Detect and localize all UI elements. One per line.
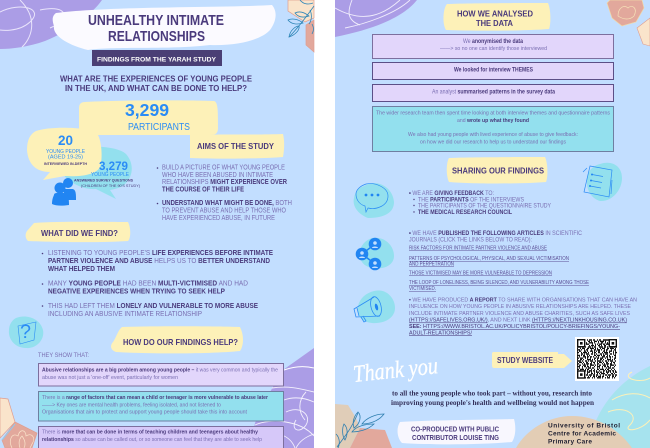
text block: findings bullets: WHAT HELPED THEM [48,266,115,273]
panel: finding box 3: relationships so abuse can be called out, or so someone can feel that they are able to seek help [42,437,262,443]
panel: method box research team: on how we did our research to help us to understand our findings [420,139,566,145]
text: they show that: THEY SHOW THAT: [38,353,89,359]
heading: main question: WHAT ARE THE EXPERIENCES OF YOUNG PEOPLE [60,74,252,84]
text block: aims bullets: WHO HAVE BEEN ABUSED IN INTIMATE [162,172,273,179]
stat: 3,279 young people text: (CHILDREN OF THE 90'S STUDY) [81,183,141,188]
panel: method box research team: We also had young people with lived experience of abuse to give feedback: [408,132,578,138]
text: thanks message: improving young people's health and wellbeing would not happen [391,400,594,407]
decoration: bottom left hexagons and leaves [335,404,392,448]
heading: how we analysed the data: THE DATA [476,18,513,28]
button: co-produced brush label [398,419,515,444]
text block: report: INCLUDE INTIMATE PARTNER VIOLENCE AND ABUSE CHARITIES, SUCH AS SAFE LIVES [409,311,630,317]
stat: 3,299 participants: 3,299 [125,100,169,120]
panel: method box anonymised [372,34,614,58]
panel: method box patterns [372,84,614,102]
text block: aims bullets: UNDERSTAND WHAT MIGHT BE DONE, BOTH [162,200,292,207]
panel: finding box 2: Organisations that aim to protect and support young people should take this into account [42,410,247,416]
text block: aims bullets [157,164,292,222]
text block: report: ADULT-RELATIONSHIPS/ [409,330,472,336]
decoration: title brush stroke [53,5,276,50]
stat: 3,299 participants [79,100,218,135]
heading: how do our findings help [111,326,243,353]
text block: findings bullets [42,250,273,318]
panel: method box anonymised: We anonymised the data [463,39,524,45]
title: RELATIONSHIPS [108,28,205,45]
title [88,12,224,45]
text block: published articles: JOURNALS (CLICK THE LINKS BELOW TO READ): [409,238,532,244]
decoration: bottom right purple blob [250,348,314,448]
panel: finding box 3 [38,426,284,448]
text block: giving feedback [409,191,551,216]
decoration: bottom right teal blob [588,366,650,448]
heading: how we analysed the data: HOW WE ANALYSED [457,8,533,18]
text block: published articles: PATTERNS OF PSYCHOLOGICAL, PHYSICAL, AND SEXUAL VICTIMISATION [409,256,569,262]
decoration: right page top right hexagons [607,0,650,46]
stat: 3,279 young people text [74,159,141,188]
stat bubble: 20 interviewed young people [27,128,102,180]
text block: findings bullets: PARTNER VIOLENCE AND ABUSE HELPS US TO BETTER UNDERSTAND [48,258,270,265]
text block: report [409,298,637,336]
text block: report: INFLUENCE ON HOW YOUNG PEOPLE IN ABUSIVE RELATIONSHIPS ARE HELPED. THESE [409,304,631,310]
panel: method box patterns: An analyst summarised patterns in the survey data [432,90,556,96]
callout: study website arrow: STUDY WEBSITE [497,355,553,365]
panel: method box research team [372,106,614,152]
heading: sharing our findings [447,157,547,184]
panel: left page background [0,0,314,448]
panel: finding box 1: abuse was not just a 'one-off' event, particularly for women [42,375,178,381]
button: co-produced brush label: CONTRIBUTOR LOUISE TING [412,433,499,442]
button: co-produced brush label: CO-PRODUCED WITH PUBLIC [411,424,499,434]
text block: published articles: VICTIMISED. [409,286,436,292]
text block: findings bullets: THIS HAD LEFT THEM LONELY AND VULNERABLE TO MORE ABUSE [48,303,258,310]
decoration: bottom right tan blob [516,416,632,448]
text block: published articles: THE LOOP OF LONELINESS, BEING SILENCED, AND VULNERABILITY AMONG THOSE [409,280,590,286]
panel: method box research team: The wider research team then spent time looking at both interview themes and questionnaire patterns [376,110,610,116]
text block: aims bullets: RELATIONSHIPS MIGHT EXPERIENCE OVER [162,179,287,186]
panel: method box themes [372,62,614,80]
icon: people [52,178,76,206]
icon: share network [356,238,394,270]
icon: megaphone [354,290,395,323]
decoration: top left purple blob [0,0,102,49]
heading: what did we find [26,222,130,242]
text: University of Bristol credit [548,422,620,446]
stat bubble: teal survey bubble [57,147,132,199]
text block: findings bullets: INCLUDING AN ABUSIVE INTIMATE RELATIONSHIP [48,311,202,318]
text: thank you script: Thank you [352,353,439,388]
heading: sharing our findings: SHARING OUR FINDINGS [452,166,544,176]
panel: method box anonymised: ——> so no one can identify those interviewed [440,46,547,52]
stat: 3,299 participants: PARTICIPANTS [128,122,190,133]
heading: how do our findings help: HOW DO OUR FINDINGS HELP? [123,337,238,347]
stat bubble: 20 interviewed young people: (AGED 19-25) [48,154,83,160]
icon: question mark note [9,316,43,348]
text block: giving feedback: THE MEDICAL RESEARCH COUNCIL [418,210,512,216]
panel: finding box 2: ——> Key ones are mental health problems, feeling isolated, and not listened to [42,402,221,408]
stat bubble: 20 interviewed young people: YOUNG PEOPLE [46,149,85,155]
text block: published articles [409,231,590,292]
text block: giving feedback: • WE ARE GIVING FEEDBACK TO: [409,191,494,197]
callout: study website arrow [492,352,572,368]
panel: finding box 2: There is a range of factors that can mean a child or teenager is more vulnerable to abuse later [42,395,269,401]
text: thanks message [391,390,594,407]
text block: report: SEE: HTTPS://WWW.BRISTOL.AC.UK/POLICYBRISTOL/POLICY-BRIEFINGS/YOUNG- [409,324,620,330]
text: thanks message: to all the young people who took part – without you, research into [392,390,593,398]
stat: 3,279 young people text: ANSWERED SURVEY QUESTIONS [74,178,133,182]
panel: method box research team: and wrote up what they found [457,118,530,124]
text block: aims bullets: BUILD A PICTURE OF WHAT YOUNG PEOPLE [162,164,285,172]
panel: finding box 2 [38,392,284,421]
icon: speech bubble [354,183,394,218]
text block: published articles: RISK FACTORS FOR INTIMATE PARTNER VIOLENCE AND ABUSE [409,246,548,252]
text block: findings bullets: MANY YOUNG PEOPLE HAD BEEN MULTI-VICTIMISED AND HAD [48,281,248,288]
text block: aims bullets: THE COURSE OF THEIR LIFE [162,186,244,193]
heading: aims of the study [190,134,284,159]
stat bubble: 20 interviewed young people: 20 [58,133,73,148]
text block: findings bullets: NEGATIVE EXPERIENCES WHEN TRYING TO SEEK HELP [48,288,225,295]
text block: report: • WE HAVE PRODUCED A REPORT TO SHARE WITH ORGANISATIONS THAT CAN HAVE AN [409,298,637,304]
decoration: right page top left purple blob [335,0,417,37]
text block: published articles: AND PERPETRATION [409,262,454,268]
stat bubble: 20 interviewed young people: INTERVIEWED IN-DEPTH [44,162,87,166]
text: University of Bristol credit: Primary Care [548,438,592,446]
QR code [575,337,619,381]
decoration: bottom left hexagons [0,398,37,448]
text: University of Bristol credit: Centre for Academic [548,430,616,438]
stat: 3,279 young people text: 3,279 [99,159,128,173]
text block: report: (HTTPS://SAFELIVES.ORG.UK/), AND NEXT LINK (HTTPS://NEXTLINKHOUSING.CO.UK) [409,318,627,324]
panel: finding box 1: Abusive relationships are a big problem among young people – it was very common and typically the [42,367,278,373]
heading: main question: IN THE UK, AND WHAT CAN BE DONE TO HELP? [65,83,247,93]
heading: what did we find: WHAT DID WE FIND? [41,228,118,238]
text: University of Bristol credit: University of Bristol [548,422,620,430]
panel: method box themes: We looked for interview THEMES [454,68,533,74]
icon: document list [583,163,622,201]
title: UNHEALTHY INTIMATE [88,12,224,29]
heading: main question [60,74,252,93]
icon: question mark note: ? [20,322,31,343]
text block: published articles: THOSE VICTIMISED MAY BE MORE VULNERABLE TO DEPRESSION [409,270,552,276]
text block: findings bullets: LISTENING TO YOUNG PEOPLE'S LIFE EXPERIENCES BEFORE INTIMATE [48,250,273,257]
text block: giving feedback: THE PARTICIPANTS OF THE INTERVIEWS [418,197,524,203]
panel: finding box 3: There is more that can be done in terms of teaching children and teenagers about healthy [42,430,259,436]
banner: findings from the YARAH study [92,50,222,66]
stat: 3,279 young people text: YOUNG PEOPLE [91,172,129,178]
banner: findings from the YARAH study: FINDINGS FROM THE YARAH STUDY [97,56,217,63]
heading: how we analysed the data [443,3,550,31]
text block: giving feedback: THE PARTICIPANTS OF THE QUESTIONNAIRE STUDY [418,204,551,210]
decoration: top right hexagons and leaves [288,0,314,52]
panel: right page background [335,0,650,448]
panel: finding box 1 [38,364,284,386]
text block: aims bullets: HAVE EXPERIENCED ABUSE, IN FUTURE [162,215,275,222]
heading: aims of the study: AIMS OF THE STUDY [197,141,274,151]
text block: aims bullets: TO PREVENT ABUSE AND HELP THOSE WHO [162,208,286,214]
text block: published articles: • WE HAVE PUBLISHED THE FOLLOWING ARTICLES IN SCIENTIFIC [409,231,583,237]
